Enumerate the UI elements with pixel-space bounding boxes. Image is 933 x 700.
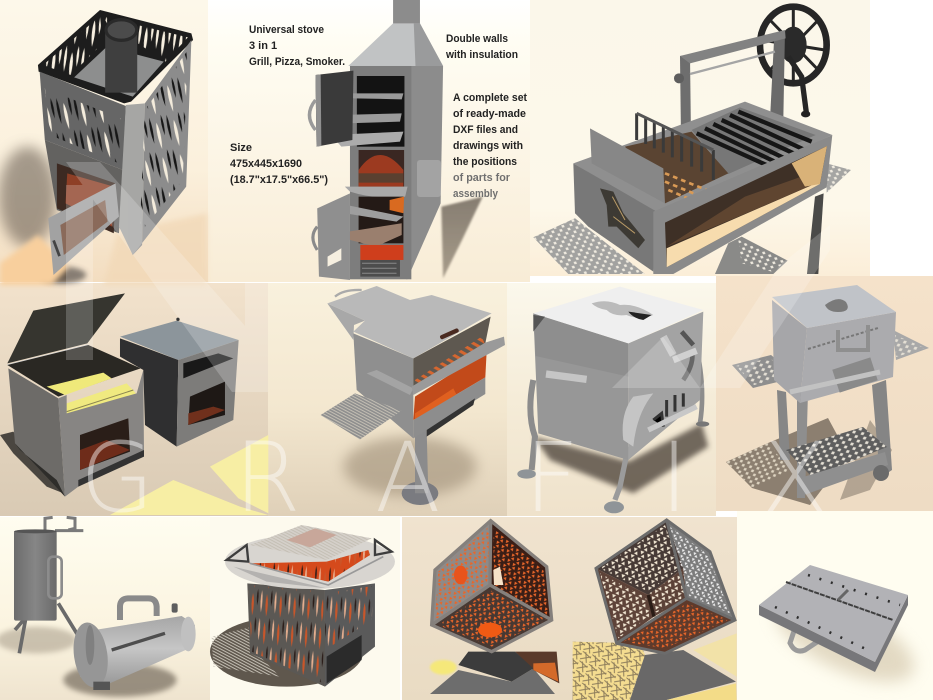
watermark: GRAFIX lettering: R — [234, 422, 301, 534]
panel: fire pit with circular table — [210, 525, 395, 687]
panel: pair of box stoves — [0, 293, 268, 515]
text block: ready-made DXF files: DXF files and — [453, 124, 518, 136]
panel: folding briefcase grill — [759, 565, 926, 699]
text block: ready-made DXF files: of parts for — [453, 172, 511, 184]
text block: universal stove: Universal stove — [249, 24, 324, 36]
watermark: GRAFIX lettering: G — [80, 422, 154, 534]
text block: ready-made DXF files: assembly — [453, 188, 499, 200]
watermark: large translucent logo shapes — [66, 160, 830, 392]
text block: ready-made DXF files: the positions — [453, 156, 517, 168]
text block: ready-made DXF files: of ready-made — [453, 108, 526, 120]
watermark: GRAFIX lettering: X — [762, 422, 828, 534]
panel: asado grill with wheel — [533, 7, 851, 274]
panel: perforated wood stove with chimney — [0, 10, 207, 285]
text block: double walls: Double walls — [446, 33, 508, 45]
text block: size: 475x445x1690 — [230, 158, 302, 170]
panel: vertical and horizontal smokers — [0, 517, 196, 697]
text block: universal stove: Grill, Pizza, Smoker. — [249, 56, 345, 68]
panel: pedestal grill — [321, 286, 505, 505]
watermark: GRAFIX lettering — [80, 422, 828, 534]
text block: ready-made DXF files: drawings with — [453, 140, 523, 152]
text block: size: Size — [230, 142, 252, 154]
text block: size: (18.7"x17.5"x66.5") — [230, 174, 328, 186]
text block: universal stove: 3 in 1 — [249, 40, 277, 52]
panel: ornate cast stove — [517, 287, 709, 513]
panel: diamond cube fire sculpture — [430, 521, 559, 694]
text block: ready-made DXF files — [453, 92, 527, 200]
watermark: GRAFIX lettering: F — [524, 422, 579, 534]
panel: tilted lattice cube sculpture — [573, 520, 737, 700]
text block: double walls: with insulation — [445, 49, 518, 61]
text block: ready-made DXF files: A complete set — [453, 92, 527, 104]
text block: double walls — [445, 33, 518, 61]
panel: cart grill with side shelves — [726, 285, 929, 505]
text block: size — [230, 142, 328, 186]
text block: universal stove — [249, 24, 345, 68]
panel: universal 3-in-1 tall stove — [309, 0, 483, 280]
watermark: GRAFIX lettering: A — [375, 422, 441, 534]
watermark: GRAFIX lettering: I — [660, 422, 688, 534]
